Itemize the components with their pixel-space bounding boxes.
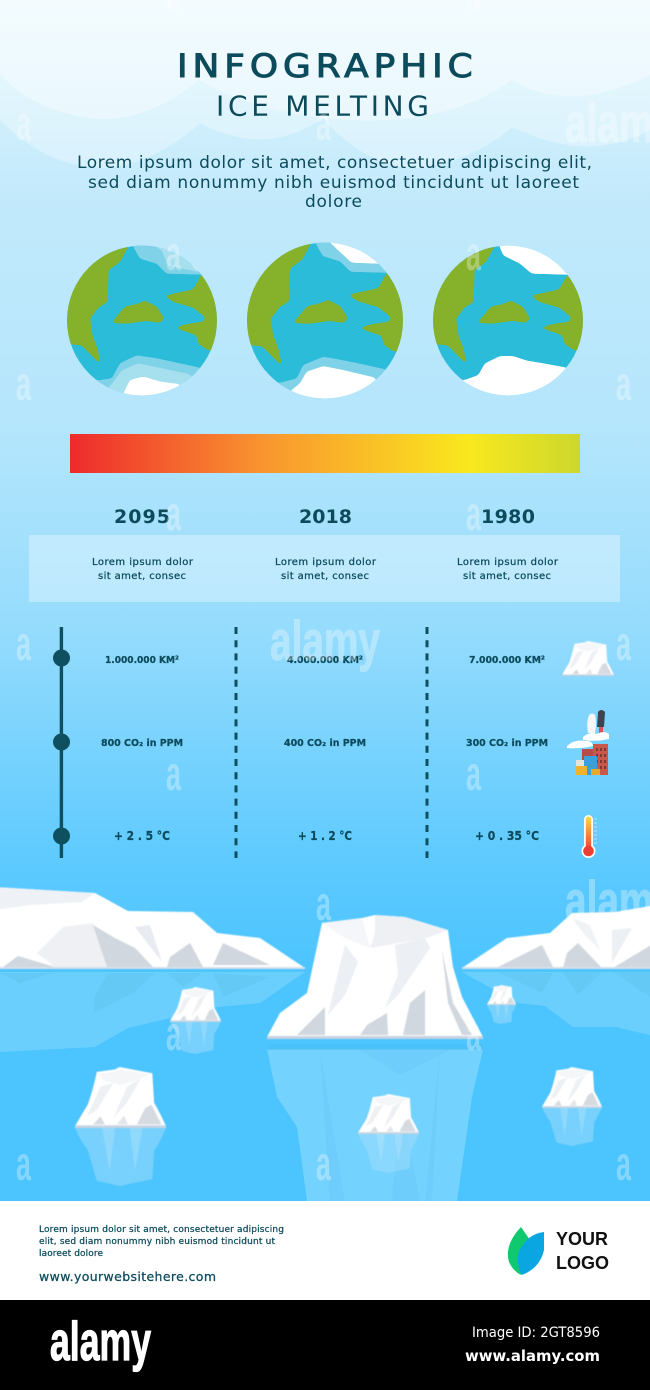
icon: factory	[567, 710, 609, 775]
small icebergs	[75, 985, 602, 1186]
stats: 1980: 300 CO₂ in PPM	[466, 738, 548, 749]
panel: captions: sit amet, consec	[281, 571, 369, 582]
watermarks: a	[166, 488, 181, 541]
intro text: sed diam nonummy nibh euismod tincidunt ut laoreet	[88, 173, 579, 193]
watermarks: a	[616, 358, 631, 411]
stats: 2095: + 2 . 5 °C	[114, 828, 170, 843]
globe: 1980	[433, 246, 583, 396]
watermarks: a	[616, 618, 631, 671]
stats: 2095: 800 CO₂ in PPM	[101, 738, 183, 749]
logo: LOGO	[556, 1253, 609, 1273]
alamy footer bar: www.alamy.com	[465, 1347, 600, 1365]
left glacier	[0, 887, 305, 969]
clouds	[0, 0, 650, 168]
footer text: elit, sed diam nonummy nibh euismod tincidunt ut	[39, 1237, 275, 1247]
alamy footer bar: alamy	[50, 1310, 151, 1372]
footer text: www.yourwebsitehere.com	[39, 1269, 216, 1284]
watermarks: a	[166, 228, 181, 281]
watermarks: a	[316, 1138, 331, 1191]
title: ICE MELTING	[216, 90, 429, 122]
watermarks: a	[466, 228, 481, 281]
panel: captions: sit amet, consec	[98, 571, 186, 582]
temperature gradient bar	[70, 434, 580, 473]
panel: captions: Lorem ipsum dolor	[92, 557, 194, 568]
title: INFOGRAPHIC	[177, 48, 473, 85]
stats: 1980: + 0 . 35 °C	[475, 828, 539, 843]
watermarks: a	[466, 748, 481, 801]
footer text: laoreet dolore	[39, 1249, 103, 1259]
intro text	[77, 153, 592, 212]
alamy footer bar: Image ID: 2GT8596	[472, 1325, 600, 1341]
intro text: Lorem ipsum dolor sit amet, consectetuer adipiscing elit,	[77, 153, 592, 173]
stats: 2018: + 1 . 2 °C	[298, 828, 352, 843]
watermarks: a	[316, 98, 331, 151]
footer panel	[0, 1201, 650, 1300]
watermarks: a	[16, 1138, 31, 1191]
icon: thermometer	[582, 815, 597, 858]
panel: captions: Lorem ipsum dolor	[275, 557, 377, 568]
logo: YOUR	[556, 1229, 608, 1249]
water reflections of glaciers	[0, 972, 650, 1052]
watermarks: a	[16, 618, 31, 671]
stats: 2018	[284, 655, 366, 843]
watermarks: a	[466, 1008, 481, 1061]
watermarks: alamy	[270, 609, 380, 672]
globe: 2018	[247, 242, 403, 398]
stats: 2095	[101, 655, 183, 843]
icon: iceberg	[562, 641, 614, 676]
globe: 2095	[67, 246, 217, 396]
intro text: dolore	[305, 192, 362, 212]
stats: 2018: 400 CO₂ in PPM	[284, 738, 366, 749]
panel: captions: Lorem ipsum dolor	[457, 557, 559, 568]
dashed column dividers	[236, 627, 427, 858]
timeline with dots	[53, 627, 70, 858]
panel: captions: sit amet, consec	[463, 571, 551, 582]
stats: 1980	[466, 655, 548, 843]
right glacier	[462, 905, 650, 969]
watermarks: a	[16, 358, 31, 411]
watermarks: a	[616, 1138, 631, 1191]
central iceberg	[267, 915, 483, 1039]
year labels: 2095	[114, 506, 170, 528]
stats: 2018: 4.000.000 KM²	[287, 655, 363, 666]
logo	[508, 1227, 609, 1275]
watermarks: a	[316, 878, 331, 931]
panel: captions	[29, 535, 620, 602]
stats: 2095: 1.000.000 KM²	[105, 655, 179, 666]
year labels: 2018	[299, 506, 352, 528]
watermarks: a	[166, 748, 181, 801]
alamy footer bar	[0, 1300, 650, 1390]
title	[177, 48, 473, 123]
year labels: 1980	[481, 506, 535, 528]
stats: 1980: 7.000.000 KM²	[469, 655, 545, 666]
watermarks: a	[466, 488, 481, 541]
footer text: Lorem ipsum dolor sit amet, consectetuer adipiscing	[39, 1225, 284, 1235]
year labels	[114, 506, 535, 528]
watermarks: a	[16, 98, 31, 151]
watermarks: a	[166, 1008, 181, 1061]
footer text	[39, 1225, 284, 1284]
central iceberg reflection	[267, 1044, 483, 1201]
